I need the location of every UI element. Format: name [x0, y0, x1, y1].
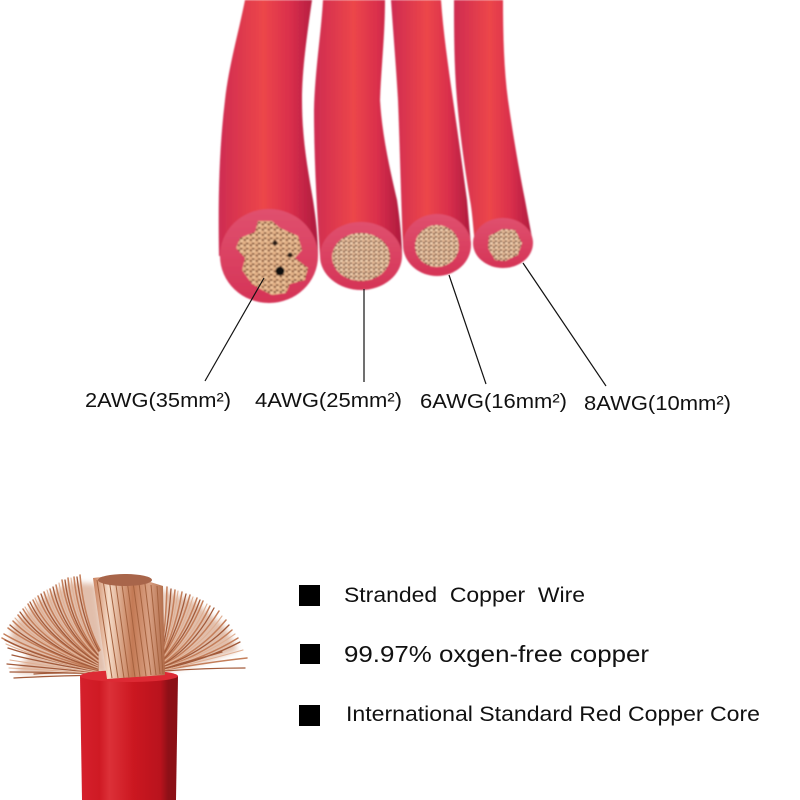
cable: 4AWG: [314, 0, 402, 290]
copper strands: right fan: [162, 587, 247, 671]
feature text 1: Stranded Copper Wire: [344, 583, 585, 607]
bundle end: cut face: [98, 574, 152, 586]
fan backing tone: [10, 582, 238, 676]
cable: 6AWG: [391, 0, 471, 276]
leader line: 2AWG: [205, 278, 264, 381]
cable: 2AWG: [219, 0, 318, 303]
leader line: 6AWG: [449, 275, 486, 384]
copper strands: left fan: [2, 575, 100, 678]
label: 2AWG: 2AWG(35mm²): [85, 389, 231, 412]
copper strands: central bundle: [93, 574, 165, 679]
bullet square 2: [300, 644, 320, 664]
bullet square 1: [299, 585, 320, 606]
leader line: 8AWG: [523, 263, 606, 386]
label: 6AWG: 6AWG(16mm²): [420, 390, 567, 413]
cable: 8AWG: [454, 0, 533, 268]
stripped cable photo: [2, 574, 247, 800]
red jacket: [80, 670, 178, 800]
feature text 2: 99.97% oxgen-free copper: [344, 641, 649, 667]
leader line: 4AWG: [363, 289, 365, 382]
bundle strand lines: [97, 578, 163, 678]
bullet square 3: [299, 705, 320, 726]
label: 8AWG: 8AWG(10mm²): [584, 392, 731, 415]
feature text 3: International Standard Red Copper Core: [346, 703, 760, 726]
label: 4AWG: 4AWG(25mm²): [255, 389, 402, 412]
